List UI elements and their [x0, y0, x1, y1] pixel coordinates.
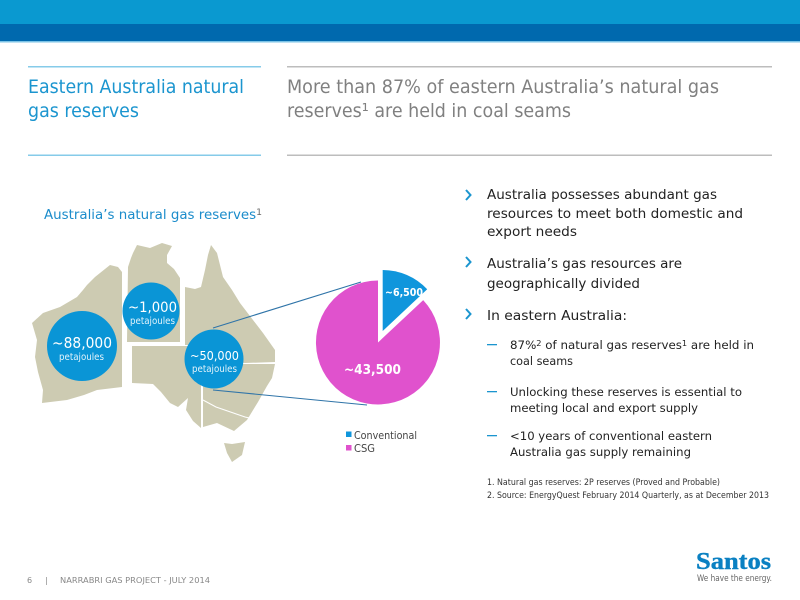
bullet: abundant resources: resources to meet both domestic and	[487, 207, 743, 222]
region: Queensland	[185, 245, 275, 363]
sub-bullet: coal seams share: are held in	[687, 338, 754, 352]
sub-bullet: unlocking reserves: Unlocking these reserves is essential to	[510, 385, 742, 399]
footer: 6	[27, 576, 32, 585]
top banner	[0, 0, 800, 42]
callout: central reserves: ~1,000	[128, 300, 177, 316]
logo: Santos	[696, 549, 772, 584]
pie chart	[316, 270, 440, 404]
callout: central reserves	[122, 282, 180, 340]
pie slice: conventional	[383, 270, 427, 331]
map of Australia	[32, 243, 275, 462]
region: New South Wales and Victoria	[203, 364, 275, 431]
bullet: abundant resources	[466, 188, 743, 240]
state border lines	[202, 390, 258, 428]
callout: western reserves	[47, 311, 117, 381]
heading: key message: More than 87% of eastern Australia’s natural gas	[287, 76, 719, 98]
heading: key message	[287, 66, 772, 156]
chart title: Australia’s natural gas reserves	[44, 208, 250, 223]
sub-bullet: remaining supply: Australia gas supply remaining	[510, 445, 691, 459]
callout: eastern reserves	[184, 330, 244, 388]
footnotes	[487, 478, 769, 501]
sub-bullet: unlocking reserves	[487, 385, 742, 415]
heading: section title: gas reserves	[28, 100, 139, 122]
callout: western reserves: ~88,000	[52, 334, 112, 352]
region: Northern Territory	[127, 243, 180, 342]
callout: eastern reserves: ~50,000	[190, 348, 239, 363]
value label: conventional: ~6,500	[385, 287, 423, 299]
bullet: geographic division	[466, 257, 682, 292]
region: Tasmania	[224, 442, 245, 462]
sub-bullet: coal seams share: coal seams	[510, 354, 573, 368]
sub-bullet: coal seams share: 87%	[510, 338, 536, 352]
chart legend: Conventional	[354, 430, 417, 442]
chart title: 1	[256, 208, 262, 218]
heading: section title: Eastern Australia natural	[28, 76, 244, 98]
bullet: abundant resources: export needs	[487, 225, 577, 240]
callout: western reserves: petajoules	[59, 352, 104, 363]
region: South Australia	[132, 346, 201, 428]
footer: |	[45, 576, 48, 585]
logo: Santos: Santos	[696, 549, 771, 575]
sub-bullet: coal seams share: of natural gas reserves	[542, 338, 682, 352]
sub-bullet: remaining supply: <10 years of conventional eastern	[510, 429, 712, 443]
sub-bullet: coal seams share	[487, 338, 754, 368]
bullet: abundant resources: Australia possesses abundant gas	[487, 188, 717, 203]
sub-bullet: unlocking reserves: meeting local and export supply	[510, 401, 698, 415]
bullet: geographic division: geographically divided	[487, 277, 640, 292]
region: Western Australia	[32, 265, 122, 403]
footer: NARRABRI GAS PROJECT - JULY 2014	[60, 576, 210, 585]
logo: Santos: We have the energy.	[697, 574, 772, 584]
heading: key message: reserves¹ are held in coal seams	[287, 100, 571, 122]
chart legend	[346, 430, 417, 455]
callout: central reserves: petajoules	[130, 316, 175, 327]
sub-bullet: coal seams share: 1	[682, 339, 687, 348]
footnotes: 1. Natural gas reserves: 2P reserves (Proved and Probable)	[487, 478, 720, 488]
heading: section title	[28, 66, 261, 156]
bullet: geographic division: Australia’s gas resources are	[487, 257, 682, 272]
sub-bullet: coal seams share: 2	[536, 339, 542, 348]
value label: CSG: ~43,500	[344, 363, 401, 378]
connector lines to pie	[213, 282, 367, 405]
callout: eastern reserves: petajoules	[192, 364, 237, 375]
bullet: eastern Australia: In eastern Australia:	[487, 309, 627, 324]
chart legend: CSG	[354, 443, 375, 455]
sub-bullet: remaining supply	[487, 429, 712, 459]
pie slice: CSG	[316, 280, 440, 404]
